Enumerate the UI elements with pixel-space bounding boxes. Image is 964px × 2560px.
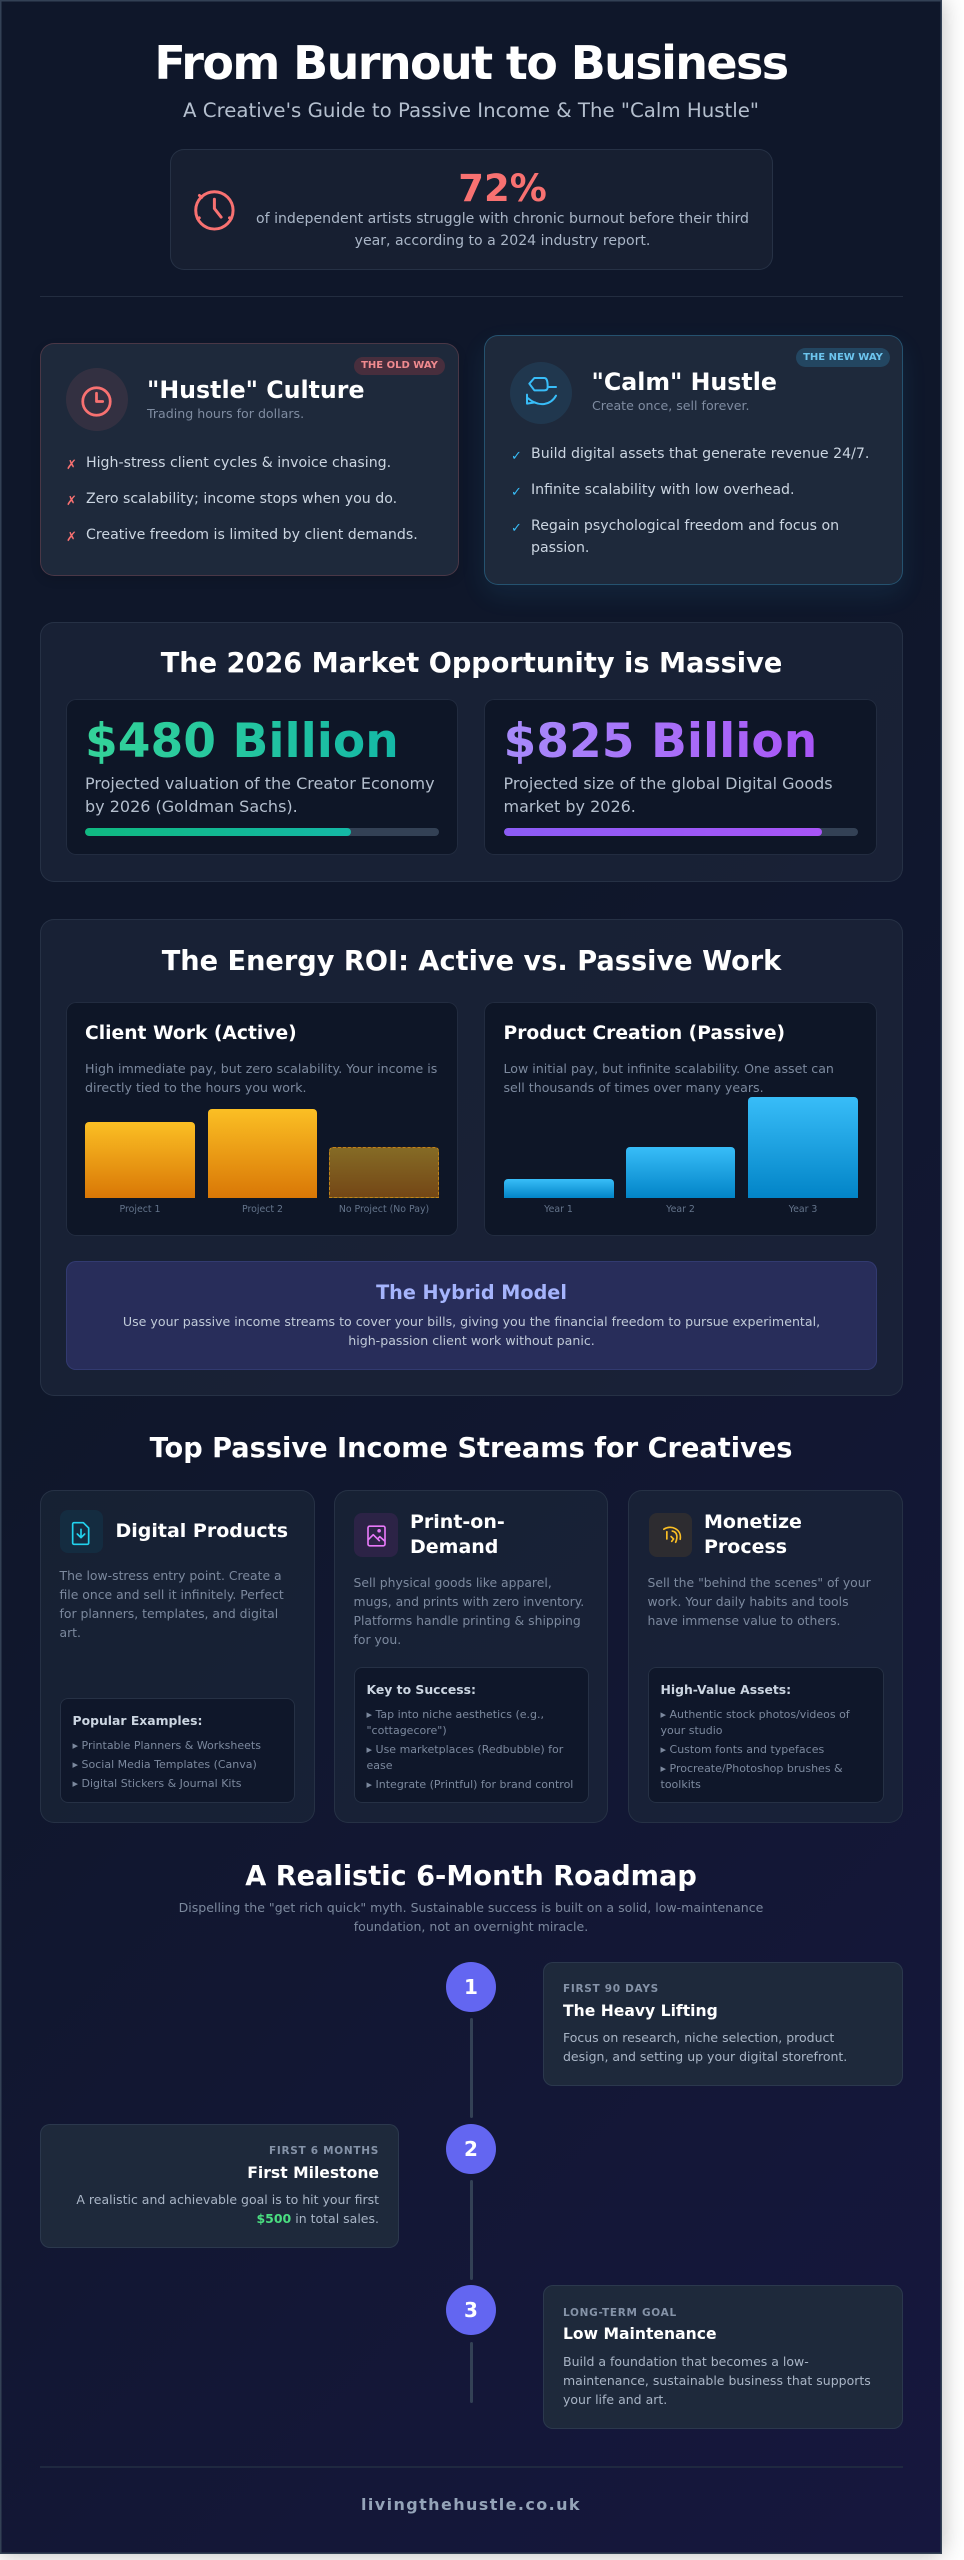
key to success box: ease <box>366 1759 393 1772</box>
bar chart: active income <box>85 1109 439 1215</box>
step 3 connector <box>470 2342 473 2403</box>
list: calm hustle benefits: ✓ <box>511 449 522 464</box>
description <box>504 1060 834 1094</box>
icon: fingerprint <box>648 1513 692 1557</box>
card: digital products <box>40 1490 315 1823</box>
subtitle: A Creative's Guide to Passive Income & The "Calm Hustle" <box>183 99 759 122</box>
description: High immediate pay, but zero scalability. Your income is <box>85 1060 437 1076</box>
badge: the new way: THE NEW WAY <box>803 352 883 363</box>
progress bar <box>85 828 439 836</box>
list: hustle downsides: ✗ <box>66 530 77 545</box>
description: market by 2026. <box>504 797 636 816</box>
step 3 marker: 3 <box>464 2298 478 2322</box>
list: calm hustle benefits: Build digital assets that generate revenue 24/7. <box>531 446 869 462</box>
examples box <box>60 1698 294 1803</box>
examples box: ▸ Social Media Templates (Canva) <box>72 1758 257 1771</box>
description: sell thousands of times over many years. <box>504 1080 764 1094</box>
callout text <box>123 1314 820 1348</box>
bar chart: passive income: Year 1 <box>544 1204 573 1215</box>
card: monetize process <box>628 1490 903 1823</box>
step 2 connector <box>470 2180 473 2280</box>
description: Projected size of the global Digital Goods <box>504 774 833 793</box>
card heading <box>704 1511 802 1558</box>
heading: income streams: Top Passive Income Streams for Creatives <box>150 1433 792 1464</box>
step 2 marker <box>446 2124 496 2174</box>
high value assets box: your studio <box>660 1724 723 1737</box>
description <box>354 1574 584 1646</box>
card heading: Monetize <box>704 1511 802 1533</box>
list: hustle downsides: High-stress client cycles & invoice chasing. <box>86 455 391 471</box>
description <box>85 1060 437 1094</box>
step 1 card: design, and setting up your digital storefront. <box>563 2048 847 2064</box>
key to success box: ▸ Integrate (Printful) for brand control <box>366 1778 573 1791</box>
list: calm hustle benefits: Regain psychological freedom and focus on <box>531 518 839 534</box>
badge: the old way: THE OLD WAY <box>361 360 438 371</box>
key to success box <box>354 1667 588 1803</box>
step 1 marker <box>446 1962 496 2012</box>
progress bar <box>504 828 858 836</box>
examples box: Popular Examples: <box>72 1712 202 1728</box>
card heading: Print-on- <box>410 1511 505 1533</box>
icon: clock <box>81 386 112 417</box>
key to success box: ▸ Use marketplaces (Redbubble) for <box>366 1743 563 1756</box>
stat description: of independent artists struggle with chronic burnout before their third <box>256 211 749 227</box>
high value assets box: High-Value Assets: <box>660 1682 791 1696</box>
list: calm hustle benefits: passion. <box>531 540 589 556</box>
step 2 marker: 2 <box>464 2137 478 2161</box>
description: file once and sell it infinitely. Perfect <box>60 1586 284 1602</box>
list: hustle downsides: Creative freedom is limited by client demands. <box>86 527 418 543</box>
key to success box: "cottagecore") <box>366 1724 447 1737</box>
value: $480 Billion <box>85 714 399 769</box>
icon: clock in circle <box>66 368 128 431</box>
list: hustle downsides: Zero scalability; income stops when you do. <box>86 491 397 507</box>
icon: circle backdrop <box>510 362 572 424</box>
tagline: Create once, sell forever. <box>592 398 750 413</box>
panel: market opportunity <box>40 622 903 882</box>
step 1 connector <box>470 2018 473 2118</box>
callout text: high-passion client work without panic. <box>348 1333 595 1348</box>
description: The low-stress entry point. Create a <box>60 1568 282 1582</box>
card: client work <box>66 1002 458 1236</box>
list: hustle downsides: ✗ <box>66 458 77 473</box>
badge: the old way <box>354 357 445 375</box>
step 3 card: Low Maintenance <box>563 2325 717 2343</box>
heading: roadmap: A Realistic 6-Month Roadmap <box>245 1861 697 1892</box>
card heading: Product Creation (Passive) <box>504 1023 785 1044</box>
bar chart: passive income: Year 3 <box>789 1204 817 1215</box>
stat number: 72% <box>458 167 547 210</box>
description <box>85 774 435 816</box>
card heading: Demand <box>410 1536 498 1558</box>
panel: calm hustle <box>484 335 903 585</box>
roadmap subheading: foundation, not an overnight miracle. <box>354 1919 588 1934</box>
bar chart: active income: No Project (No Pay) <box>339 1204 429 1215</box>
step 2 card <box>40 2124 399 2248</box>
card heading: Process <box>704 1536 787 1558</box>
card: creator economy <box>66 699 458 855</box>
high value assets box: ▸ Procreate/Photoshop brushes & <box>660 1762 843 1775</box>
description: have immense value to others. <box>648 1612 840 1628</box>
roadmap subheading <box>179 1900 763 1934</box>
icon: hand and cycle <box>526 377 557 406</box>
step 1 card: FIRST 90 DAYS <box>563 1983 659 1995</box>
description <box>648 1574 871 1628</box>
step 2 card: FIRST 6 MONTHS <box>269 2145 379 2157</box>
high value assets box: ▸ Authentic stock photos/videos of <box>660 1708 850 1721</box>
high value assets box: ▸ Custom fonts and typefaces <box>660 1743 824 1756</box>
list: calm hustle benefits <box>511 446 869 556</box>
bar chart: active income: Project 1 <box>119 1204 161 1215</box>
description: Sell physical goods like apparel, <box>354 1574 552 1590</box>
list: hustle downsides <box>66 455 418 545</box>
bar chart: passive income: Year 2 <box>666 1204 695 1215</box>
description: by 2026 (Goldman Sachs). <box>85 797 298 816</box>
list: calm hustle benefits: ✓ <box>511 521 522 536</box>
list: calm hustle benefits: Infinite scalability with low overhead. <box>531 482 794 498</box>
step 2 card: A realistic and achievable goal is to hit your first <box>76 2192 379 2206</box>
heading: The Energy ROI: Active vs. Passive Work <box>162 946 781 977</box>
step 1 marker: 1 <box>464 1975 478 1999</box>
high value assets box: toolkits <box>660 1778 701 1791</box>
description: Sell the "behind the scenes" of your <box>648 1574 871 1590</box>
card heading <box>410 1511 505 1558</box>
stat description: year, according to a 2024 industry report. <box>355 233 650 249</box>
step 2 card: $500 in total sales. <box>256 2210 379 2226</box>
callout text: Use your passive income streams to cover your bills, giving you the financial freedom to pursue experimental, <box>123 1314 820 1329</box>
heading: hustle culture: "Hustle" Culture <box>147 376 365 404</box>
high value assets box <box>648 1667 884 1803</box>
description: mugs, and prints with zero inventory. <box>354 1594 584 1608</box>
panel: energy roi <box>40 919 903 1396</box>
card: product creation <box>484 1002 877 1236</box>
card: digital goods <box>484 699 877 855</box>
description: art. <box>60 1624 81 1640</box>
step 3 card: Build a foundation that becomes a low- <box>563 2354 809 2368</box>
heading: calm hustle: "Calm" Hustle <box>592 368 777 396</box>
description: Projected valuation of the Creator Economy <box>85 774 435 793</box>
icon: alarm clock <box>194 190 235 230</box>
description: Platforms handle printing & shipping <box>354 1612 581 1628</box>
card: print on demand <box>334 1490 608 1823</box>
key to success box: Key to Success: <box>366 1682 476 1696</box>
panel: burnout stat <box>170 149 773 270</box>
step 3 card: maintenance, sustainable business that supports <box>563 2372 871 2388</box>
examples box: ▸ Digital Stickers & Journal Kits <box>72 1777 242 1790</box>
bar chart: active income: Project 2 <box>242 1204 283 1215</box>
description: for you. <box>354 1632 401 1646</box>
step 1 card: Focus on research, niche selection, product <box>563 2030 834 2044</box>
description <box>59 1568 284 1640</box>
icon: file download <box>60 1510 102 1553</box>
step 1 card: The Heavy Lifting <box>563 2002 718 2020</box>
list: hustle downsides: ✗ <box>66 494 77 509</box>
heading: The 2026 Market Opportunity is Massive <box>161 648 782 679</box>
value: $825 Billion <box>504 714 817 769</box>
bar chart: passive income <box>504 1097 858 1215</box>
panel: hustle culture <box>40 343 459 576</box>
title: From Burnout to Business <box>154 36 788 90</box>
roadmap subheading: Dispelling the "get rich quick" myth. Sustainable success is built on a solid, low-maintenance <box>179 1900 763 1915</box>
description <box>504 774 833 816</box>
examples box: ▸ Printable Planners & Worksheets <box>72 1739 261 1752</box>
icon: image <box>354 1513 398 1557</box>
description: for planners, templates, and digital <box>60 1606 278 1620</box>
card heading: Client Work (Active) <box>85 1023 297 1044</box>
callout: the hybrid model <box>66 1261 877 1370</box>
step 3 card: LONG-TERM GOAL <box>563 2307 677 2319</box>
card heading: Digital Products <box>116 1520 288 1542</box>
stat description <box>256 211 749 249</box>
description: directly tied to the hours you work. <box>85 1080 306 1094</box>
description: work. Your daily habits and tools <box>648 1594 849 1608</box>
tagline: Trading hours for dollars. <box>147 406 304 421</box>
footer: website: livingthehustle.co.uk <box>361 2494 581 2514</box>
step 3 card <box>543 2285 903 2429</box>
step 2 card: First Milestone <box>247 2164 379 2182</box>
key to success box: ▸ Tap into niche aesthetics (e.g., <box>366 1708 544 1721</box>
list: calm hustle benefits: ✓ <box>511 485 522 500</box>
step 3 marker <box>446 2285 496 2335</box>
step 3 card: your life and art. <box>563 2392 667 2406</box>
description: Low initial pay, but infinite scalability. One asset can <box>504 1060 834 1076</box>
badge: the new way <box>796 348 890 367</box>
callout heading: The Hybrid Model <box>376 1281 567 1304</box>
step 1 card <box>543 1962 903 2086</box>
